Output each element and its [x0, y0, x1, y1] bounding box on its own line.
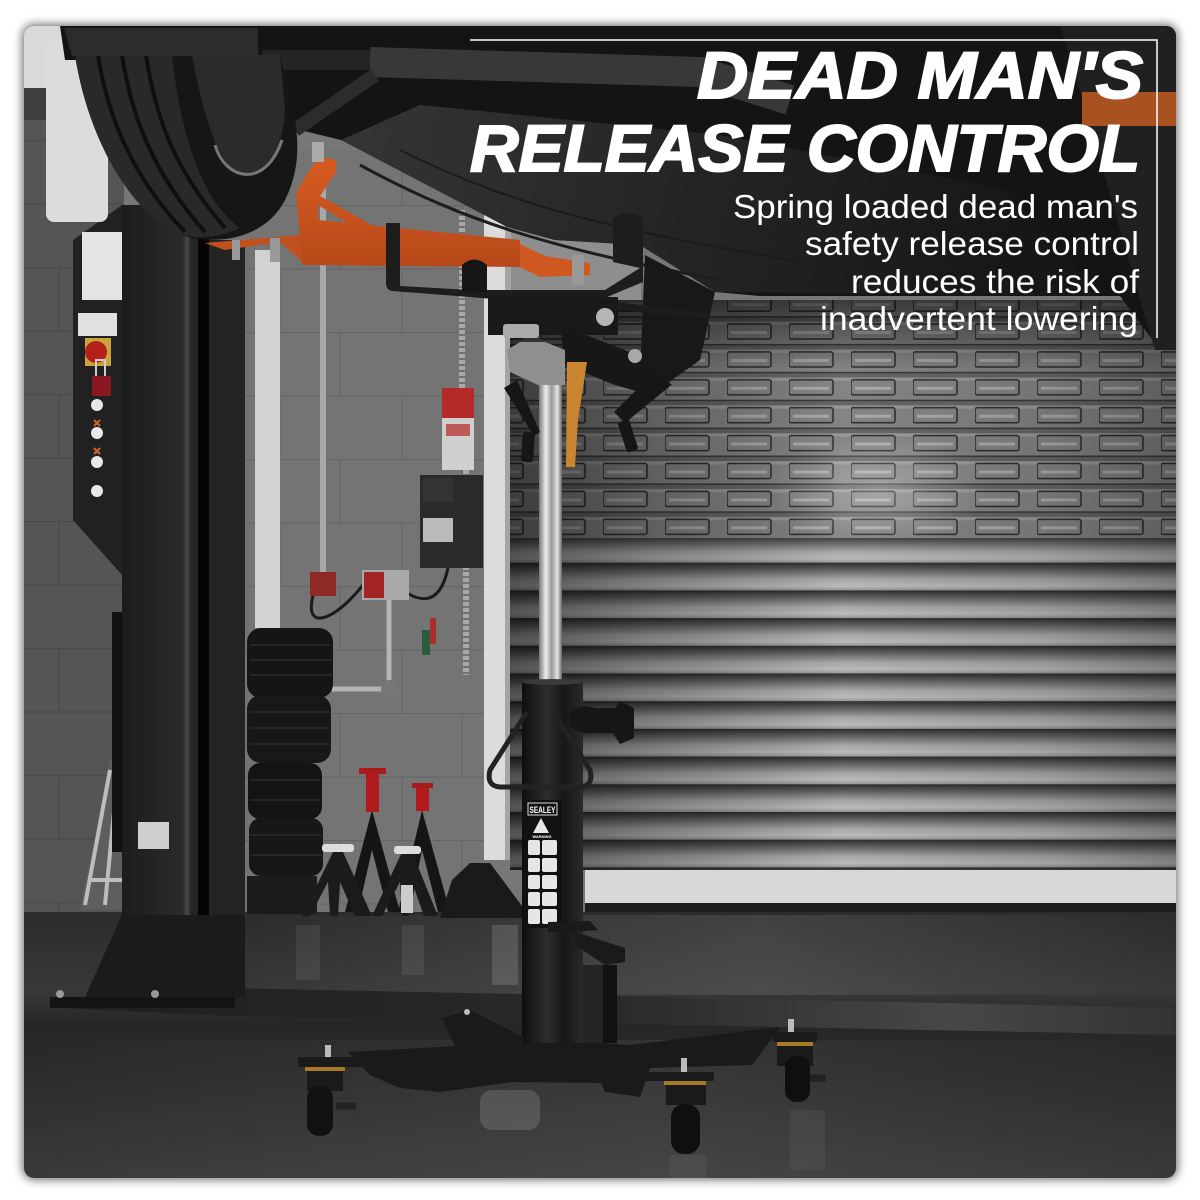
caster: left	[298, 1045, 362, 1136]
underbody panel	[341, 105, 903, 294]
lift notices	[82, 232, 122, 300]
warning label	[525, 800, 562, 928]
heading	[470, 38, 1143, 185]
heading frame lines	[470, 40, 1157, 338]
release knob	[570, 701, 634, 744]
roller shutter door	[510, 300, 1176, 912]
car underbody	[60, 26, 1176, 350]
garage wall	[24, 26, 1176, 926]
wall control box and cable	[310, 475, 483, 698]
description text: safety release control	[805, 225, 1139, 262]
caster: front	[644, 1058, 714, 1154]
pump and pedal	[548, 921, 625, 965]
white container	[46, 88, 108, 222]
tyre stack	[247, 628, 333, 914]
isolator switch and padlock	[85, 338, 111, 366]
axle stands	[302, 768, 450, 916]
carry handle	[489, 712, 591, 787]
underbody details	[262, 60, 800, 280]
description text	[733, 188, 1140, 337]
locking handles	[504, 372, 670, 462]
orange strap	[566, 362, 587, 467]
tread plate ramp	[60, 988, 1176, 1035]
transmission jack cradle	[386, 213, 672, 391]
floor	[24, 912, 1176, 1178]
heading: DEAD MAN'S	[697, 38, 1143, 112]
jack base frame	[298, 1009, 826, 1154]
wall sign and chain	[442, 210, 474, 675]
caster: rear	[464, 1009, 470, 1015]
warning label: WARNING	[532, 834, 552, 839]
caster: right	[773, 1019, 826, 1102]
wheel chock	[440, 863, 522, 918]
rear wheel behind text	[640, 26, 1176, 385]
description text: reduces the risk of	[851, 263, 1140, 300]
front tyre	[64, 28, 297, 240]
orange lift arm	[205, 142, 590, 285]
two post lift column	[50, 205, 245, 1008]
heading: RELEASE CONTROL	[470, 111, 1140, 185]
jack column	[489, 679, 634, 1043]
description text: inadvertent lowering	[820, 300, 1138, 337]
description text: Spring loaded dead man's	[733, 188, 1138, 225]
aluminium step ladder	[80, 760, 122, 910]
control buttons	[91, 399, 103, 411]
warning label: SEALEY	[530, 805, 556, 815]
chrome lifting ram	[539, 385, 562, 681]
